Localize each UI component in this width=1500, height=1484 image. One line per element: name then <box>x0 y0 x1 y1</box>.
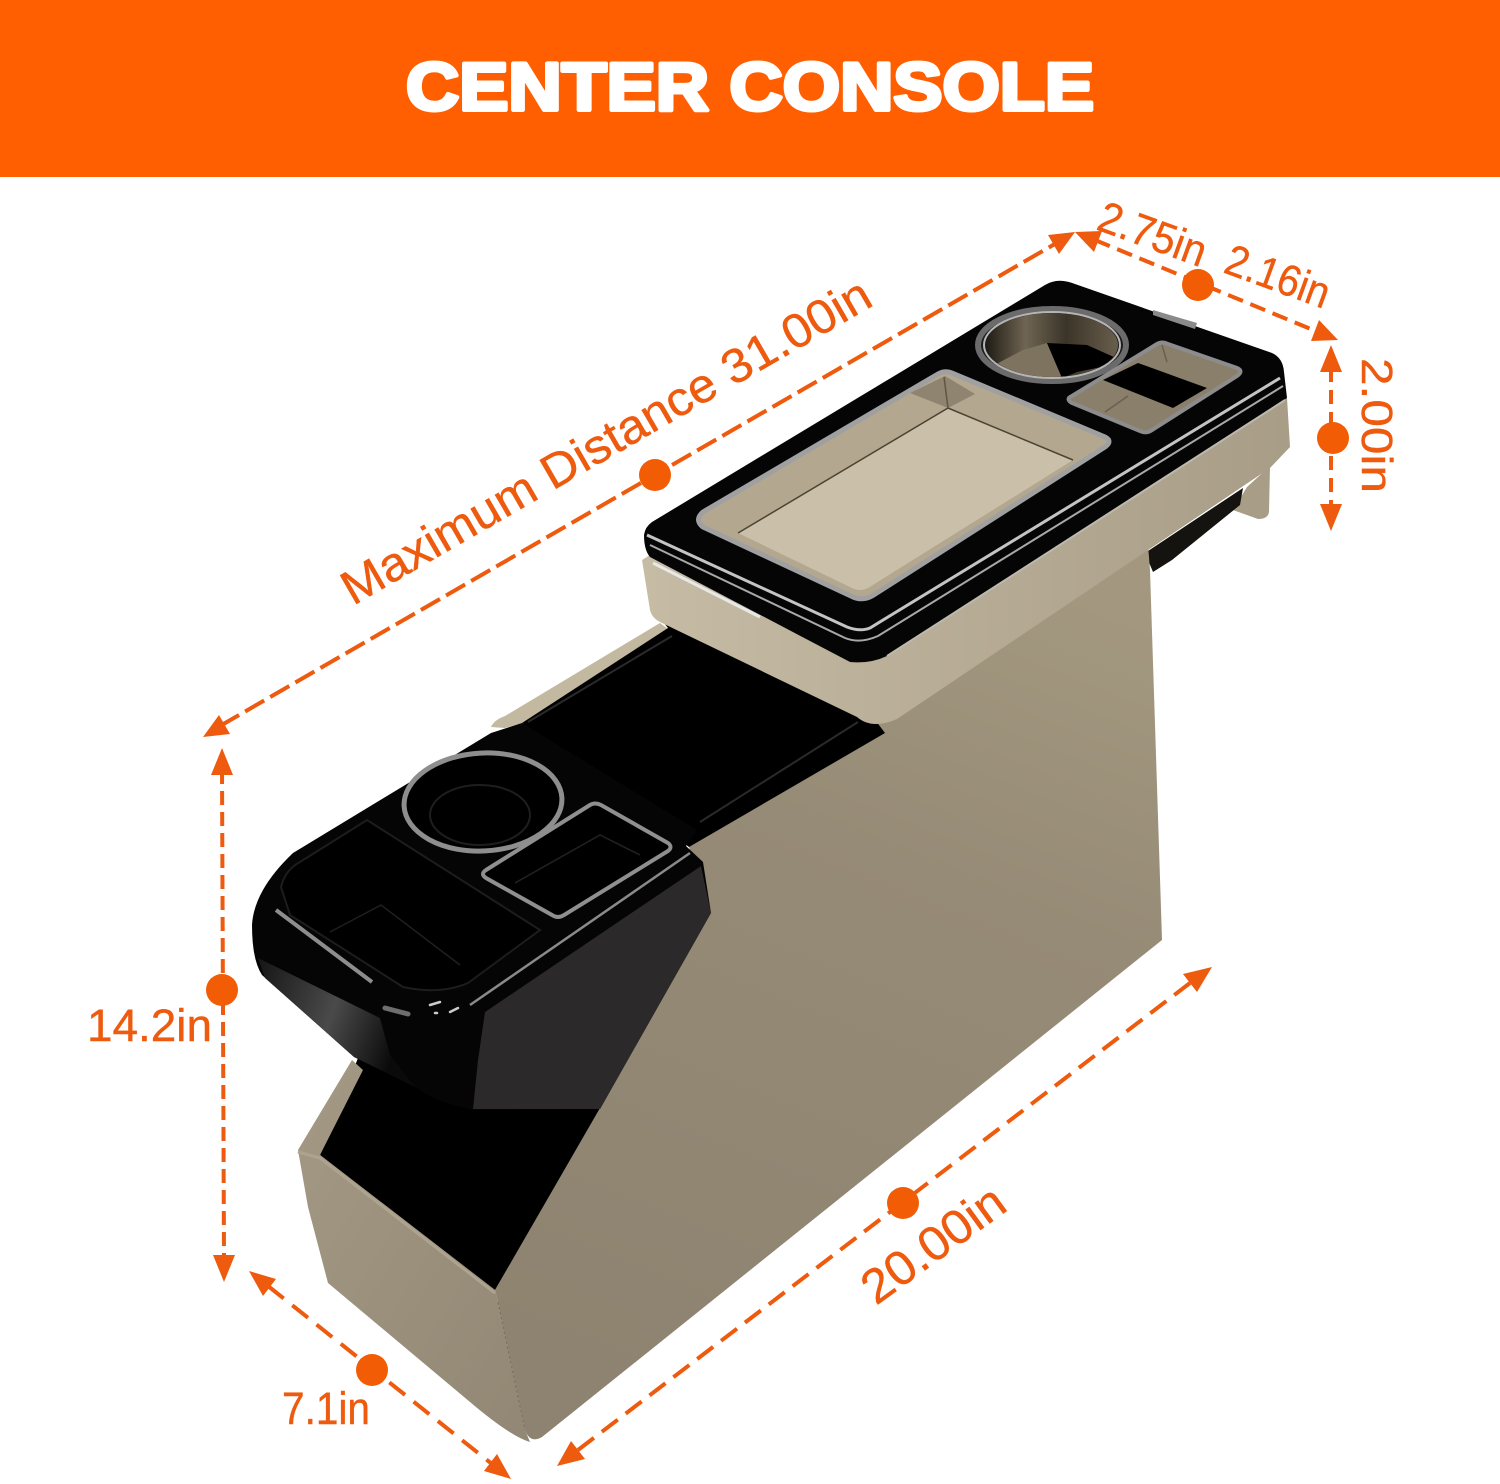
arrowheads <box>1075 231 1338 341</box>
dot <box>1317 422 1349 454</box>
dimension: width 7.1in <box>249 1271 511 1479</box>
beige strip behind compartment <box>491 623 672 728</box>
label: 20.00in <box>851 1175 1016 1315</box>
cup holder <box>978 309 1126 382</box>
dot <box>206 974 238 1006</box>
arrowheads <box>249 1271 511 1479</box>
label 2.16in: 2.16in <box>1219 235 1337 318</box>
label: 7.1in <box>282 1383 370 1434</box>
dot <box>1182 269 1214 301</box>
label: 14.2in <box>87 1000 212 1051</box>
dimension: height 14.2in <box>87 748 238 1282</box>
middle compartment <box>522 618 885 847</box>
label: Maximum Distance 31.00in <box>332 268 881 616</box>
glossy front face <box>258 958 415 1087</box>
front lid: black gloss shell <box>252 723 711 1110</box>
upper tray beige base <box>642 398 1290 724</box>
dot <box>887 1187 919 1219</box>
dimension: height 2.00in <box>1317 345 1401 531</box>
arrowheads <box>211 748 235 1282</box>
storage opening <box>320 1058 600 1290</box>
dark right face <box>473 866 711 1109</box>
label: 2.00in <box>1352 358 1401 493</box>
hinge <box>1153 310 1197 329</box>
arrowheads <box>203 232 1075 737</box>
dimension: top width <box>1075 192 1338 341</box>
lid small tray <box>483 804 670 917</box>
small tray <box>1068 342 1240 432</box>
dimension: maximum distance <box>203 232 1075 737</box>
title: CENTER CONSOLE <box>406 49 1094 125</box>
lid edge highlights <box>470 853 690 1005</box>
silver trim rails <box>647 378 1280 630</box>
arrowheads <box>557 967 1212 1466</box>
lid cup holder <box>402 749 564 855</box>
left compartment <box>281 820 540 990</box>
body side panel <box>495 545 1162 1439</box>
dimension: length 20.00in <box>557 967 1212 1466</box>
label 2.75in: 2.75in <box>1092 192 1214 277</box>
dot <box>639 459 671 491</box>
center console product illustration <box>252 281 1290 1442</box>
main tray <box>698 372 1109 599</box>
arrowheads <box>1320 345 1342 531</box>
front panel <box>298 1060 530 1442</box>
dot <box>356 1354 388 1386</box>
rear foot and bracket <box>1145 466 1270 572</box>
upper tray top plate <box>644 281 1287 662</box>
header banner <box>0 0 1500 177</box>
